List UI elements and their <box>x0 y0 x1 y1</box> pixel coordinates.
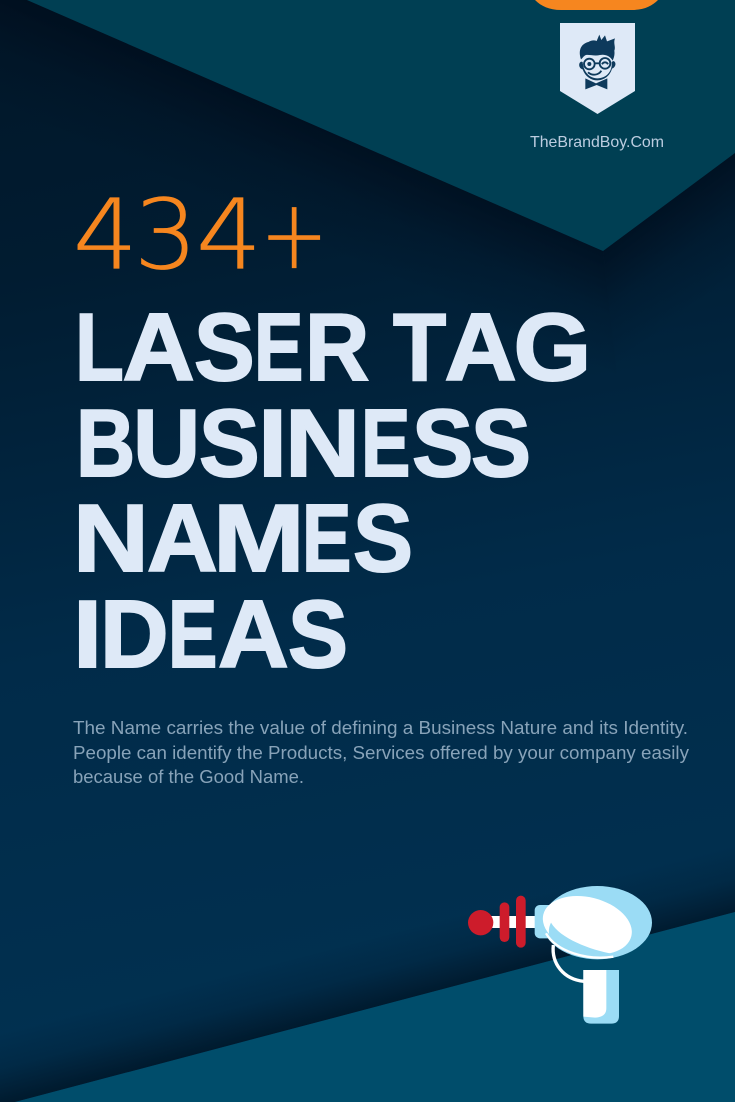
description text: People can identify the Products, Services offered by your company easily <box>73 743 689 763</box>
title: G <box>514 294 591 401</box>
title: I <box>73 581 102 688</box>
title: R <box>305 294 370 401</box>
title: B <box>76 390 135 497</box>
number: 434+: 3 <box>134 179 198 291</box>
title: S <box>288 581 348 688</box>
title: S <box>412 390 473 497</box>
title: N <box>73 485 149 592</box>
icon: boy with glasses and bow tie <box>579 35 615 89</box>
description text: because of the Good Name. <box>73 767 304 787</box>
title: U <box>133 390 200 497</box>
number: 434+ <box>73 179 328 291</box>
number: 434+: + <box>260 179 328 291</box>
number: 434+: 4 <box>73 179 138 291</box>
icon: laser gun <box>468 886 652 1024</box>
title: S <box>194 294 255 401</box>
title: L <box>75 294 124 401</box>
title: A <box>218 581 288 688</box>
title: T <box>392 294 446 401</box>
title <box>73 294 591 688</box>
title: S <box>470 390 531 497</box>
shadow of top panel, long edge <box>0 0 620 400</box>
title: M <box>213 485 305 592</box>
shadow of top panel, short edge <box>603 153 735 400</box>
title: S <box>199 390 260 497</box>
title: E <box>302 485 352 592</box>
brand name: TheBrandBoy.Com <box>530 134 664 151</box>
title: D <box>100 581 169 688</box>
title: I <box>258 390 287 497</box>
title: E <box>254 294 304 401</box>
title: A <box>146 485 217 592</box>
gun red rings <box>468 896 526 948</box>
title: S <box>353 485 413 592</box>
icon: brand badge <box>560 23 635 114</box>
panel: bottom teal shape <box>15 912 735 1102</box>
title: A <box>122 294 195 401</box>
shadow of bottom panel <box>0 840 735 1102</box>
description text <box>73 718 689 787</box>
gun barrel <box>490 916 537 928</box>
gun handle <box>583 970 619 1024</box>
description text: The Name carries the value of defining a Business Nature and its Identity. <box>73 718 688 738</box>
title: E <box>168 581 218 688</box>
title: E <box>361 390 410 497</box>
gun muzzle base <box>535 905 555 938</box>
number: 434+: 4 <box>196 179 261 291</box>
title: N <box>285 390 360 497</box>
panel: top teal shape <box>27 0 735 251</box>
orange tab <box>535 0 658 10</box>
title: A <box>444 294 517 401</box>
gun trigger guard <box>553 945 584 981</box>
gun body <box>543 886 652 959</box>
